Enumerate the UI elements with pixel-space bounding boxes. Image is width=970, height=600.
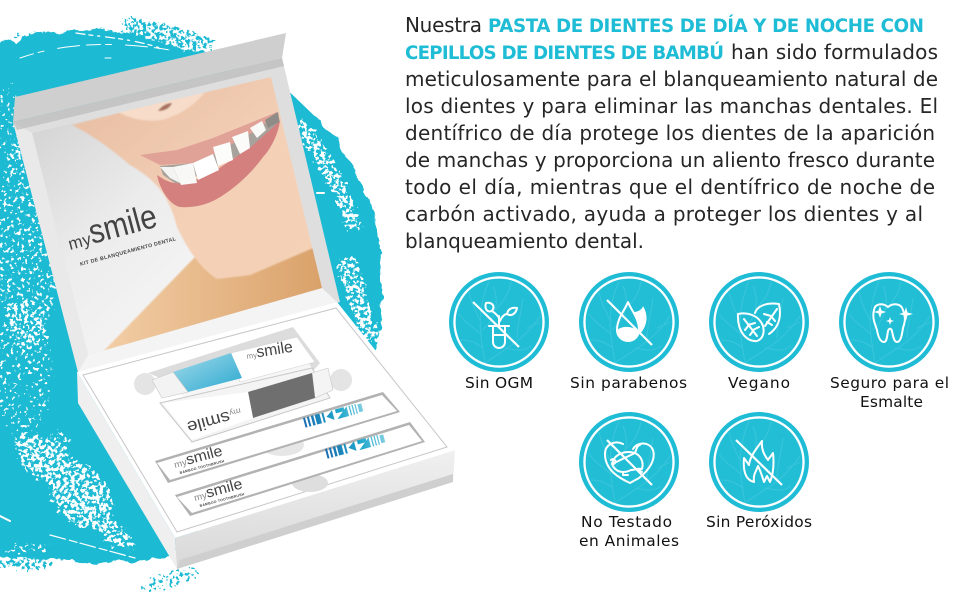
lid logo [62, 194, 178, 269]
icon: Sin Peróxidos [709, 412, 809, 512]
box base [77, 302, 455, 569]
label: Seguro para el Esmalte: Seguro para el [830, 374, 949, 392]
description text block: PASTA DE DIENTES DE DÍA Y DE NOCHE CON [488, 15, 924, 37]
lid logo: my [66, 229, 94, 254]
label: Vegano: Vegano [728, 374, 790, 392]
description text block: todo el día, mientras que el dentífrico de noche de [405, 175, 935, 199]
description text block: han sido formulados [731, 40, 938, 64]
label: Seguro para el Esmalte [830, 374, 949, 411]
icon: Sin OGM [449, 272, 549, 372]
description text block: blanqueamiento dental. [405, 229, 644, 253]
icon: Vegano [709, 272, 809, 372]
bamboo toothbrush case 2 [175, 422, 425, 516]
lid logo: smile [84, 197, 161, 252]
label: Sin Peróxidos: Sin Peróxidos [706, 513, 812, 531]
white dry-brush splatter [0, 48, 372, 561]
bottom paint flecks [0, 556, 206, 600]
bamboo toothbrush case 2: mysmile [192, 476, 244, 505]
bamboo toothbrush case 1: mysmile [172, 443, 224, 472]
label: Sin parabenos: Sin parabenos [570, 374, 687, 392]
lid photograph: smile [32, 72, 330, 360]
night charcoal toothpaste tube: mysmile [185, 404, 244, 437]
label: Seguro para el Esmalte: Esmalte [860, 393, 923, 411]
description text block: de manchas y proporciona un aliento fresco durante [405, 148, 935, 172]
label: No Testado en Animales [579, 513, 679, 550]
label: Sin OGM: Sin OGM [465, 374, 533, 392]
toothpaste compartment recess [134, 327, 352, 492]
description text block: los dientes y para eliminar las manchas dentales. El [405, 94, 938, 118]
label: No Testado en Animales: en Animales [579, 532, 679, 550]
product: opened kit box [13, 33, 455, 569]
description text block: CEPILLOS DE DIENTES DE BAMBÚ [405, 42, 724, 64]
thin white brush streaks [0, 33, 324, 558]
icon: No Testado en Animales [579, 412, 679, 512]
description text block: carbón activado, ayuda a proteger los dientes y al [405, 202, 923, 226]
description text block: dentífrico de día protege los dientes de la aparición [405, 121, 935, 145]
bamboo toothbrush case 1: BAMBOO TOOTHBRUSH [179, 459, 225, 475]
bamboo toothbrush case 1 [155, 392, 400, 483]
description text block: Nuestra [405, 13, 482, 37]
day toothpaste tube [152, 337, 315, 398]
night charcoal toothpaste tube [163, 368, 333, 440]
box lid [13, 33, 340, 372]
top edge paint flecks [4, 14, 218, 52]
description text block [405, 13, 938, 253]
icon: Seguro para el Esmalte [839, 272, 939, 372]
label: No Testado en Animales: No Testado [581, 513, 672, 531]
icon: Sin parabenos [579, 272, 679, 372]
day toothpaste tube: mysmile [245, 339, 294, 363]
lid logo: KIT DE BLANQUEAMIENTO DENTAL [79, 236, 178, 268]
description text block: meticulosamente para el blanqueamiento natural de [405, 67, 938, 91]
background: teal paint brush splash [0, 14, 382, 600]
bamboo toothbrush case 2: BAMBOO TOOTHBRUSH [199, 492, 245, 508]
